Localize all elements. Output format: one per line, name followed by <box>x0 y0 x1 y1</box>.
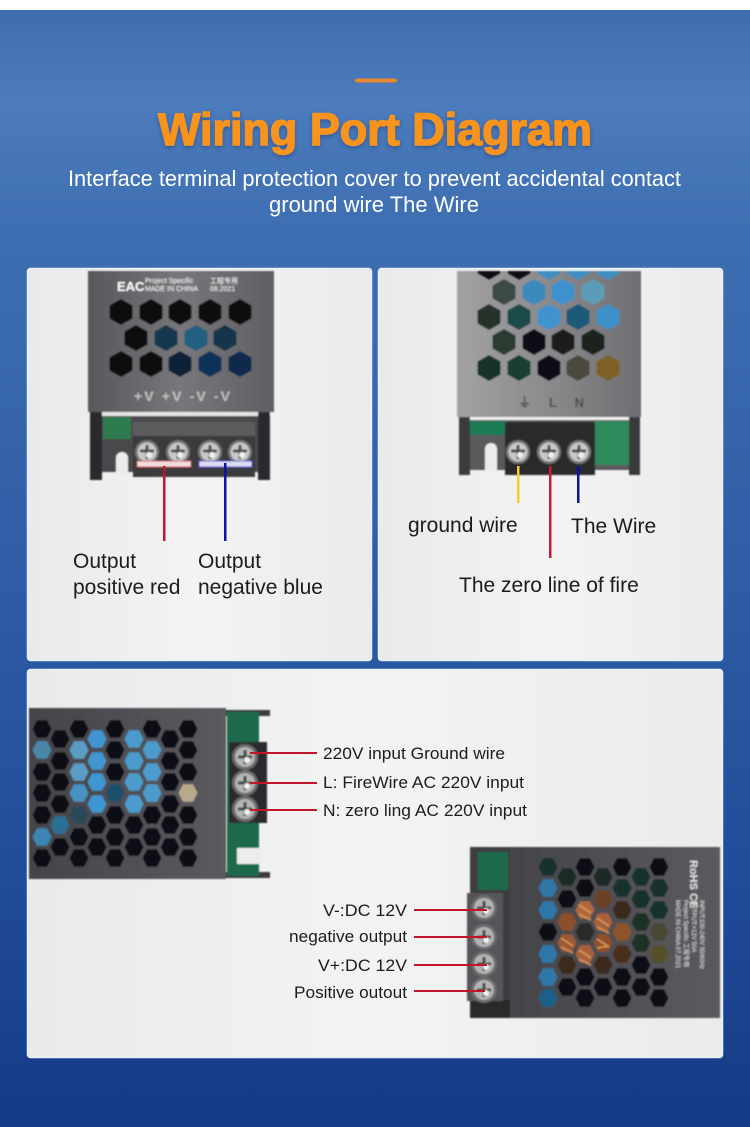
wire lead: zero red <box>549 466 552 558</box>
leader lines: input terminals <box>250 753 317 810</box>
labels: input terminals: L: FireWire AC 220V input <box>323 773 524 792</box>
power supply photo: output side: Project Specific 工程专用 <box>682 900 690 967</box>
panel: wiring overview <box>28 670 722 1058</box>
power supply photo: output end: 08.2021 <box>210 286 235 293</box>
subtitle <box>68 166 681 217</box>
power supply photo: output end: MADE IN CHINA <box>145 286 198 293</box>
power supply photo: output end: Project Specific <box>145 278 194 285</box>
label: output negative blue: negative blue <box>198 576 323 599</box>
labels: input terminals <box>323 744 527 820</box>
power supply photo: input side <box>29 708 270 879</box>
wire lead: positive red <box>163 466 166 541</box>
panel: input terminals <box>378 254 722 660</box>
labels: output terminals: negative output <box>289 927 407 946</box>
power supply photo: output side: MADE IN CHINA 07.2021 <box>674 900 680 969</box>
labels: output terminals: V-:DC 12V <box>323 901 408 920</box>
power supply photo: output side: RoHS CE <box>687 860 699 908</box>
accent line <box>355 78 397 82</box>
power supply photo: input end: ⏚ L N <box>518 395 584 410</box>
wire lead: live blue <box>577 466 580 503</box>
wire lead: ground yellow <box>517 466 520 503</box>
labels: input terminals: 220V input Ground wire <box>323 744 505 763</box>
power supply photo: output side: INPUT:100-240V 50/60Hz <box>698 900 704 969</box>
panel: output terminals <box>28 268 372 660</box>
wire lead: negative blue <box>224 463 226 541</box>
power supply photo: output end <box>88 271 274 480</box>
subtitle: Interface terminal protection cover to prevent accidental contact <box>68 166 681 191</box>
label: ground wire: ground wire <box>408 514 518 537</box>
subtitle: ground wire The Wire <box>269 192 479 217</box>
power supply photo: output end: +V +V -V -V <box>134 388 231 404</box>
leader lines: output terminals <box>414 910 487 991</box>
label: output positive red: positive red <box>73 576 180 599</box>
labels: output terminals: Positive outout <box>294 983 407 1002</box>
power supply photo: output end: 工程专用 <box>210 276 238 285</box>
label: the wire: The Wire <box>571 515 656 538</box>
labels: input terminals: N: zero ling AC 220V input <box>323 801 527 820</box>
label: zero line of fire: The zero line of fire <box>459 574 639 597</box>
power supply photo: output side <box>467 847 720 1018</box>
label: output positive red: Output <box>73 550 136 573</box>
power supply photo: output side: OUTPUT:+12V 50A <box>690 900 696 952</box>
power supply photo: input end <box>457 254 641 475</box>
label: output negative blue: Output <box>198 550 261 573</box>
labels: output terminals <box>289 901 408 1002</box>
title: Wiring Port Diagram <box>158 104 592 155</box>
labels: output terminals: V+:DC 12V <box>318 956 408 975</box>
power supply photo: output end: EAC <box>117 279 145 294</box>
